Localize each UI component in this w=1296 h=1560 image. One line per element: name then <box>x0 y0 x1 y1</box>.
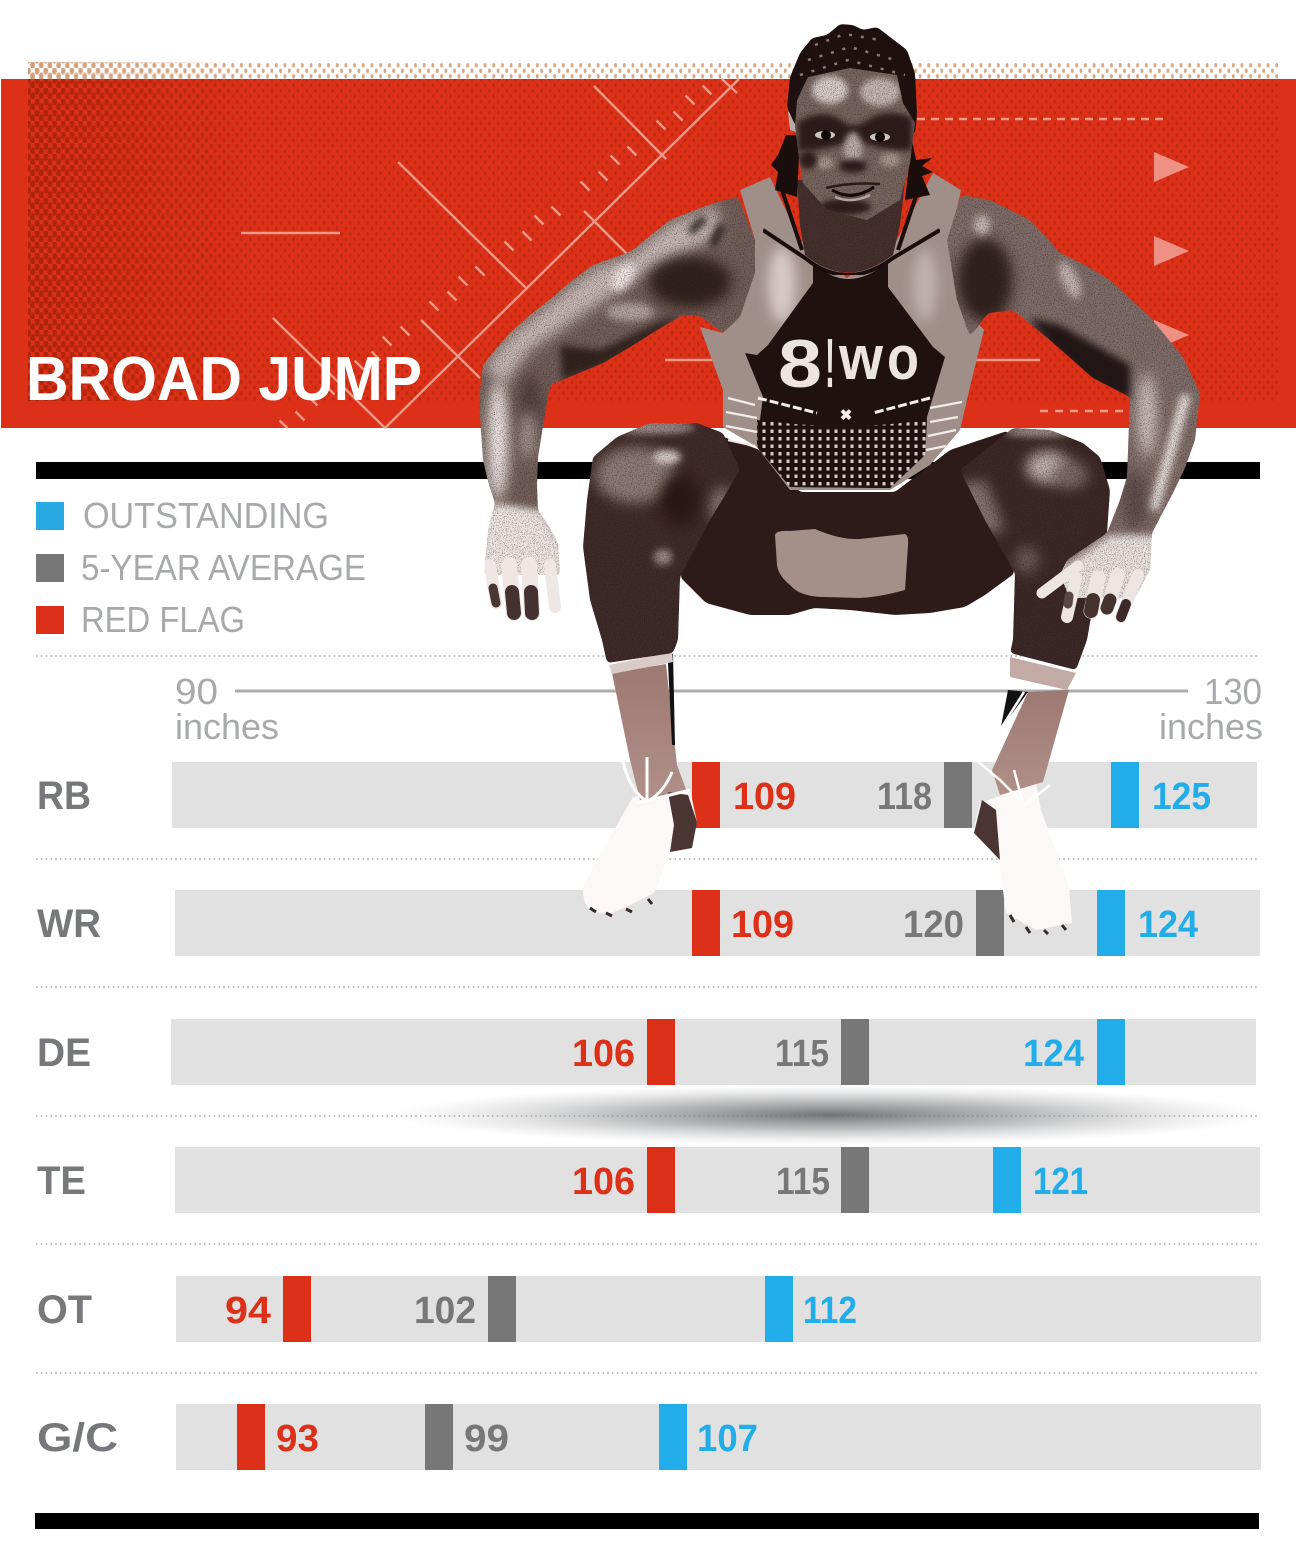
row: OT: 94 <box>225 1290 271 1332</box>
chest and neck <box>763 180 940 275</box>
axis scale: 90 to 130 inches: 130 <box>1204 671 1262 712</box>
eyes <box>815 130 890 142</box>
right hand fingers <box>1042 566 1138 617</box>
row: G/C: 107 <box>697 1418 758 1460</box>
jersey weave <box>757 420 927 488</box>
side braids <box>771 135 933 200</box>
row: TE: 115 <box>776 1161 830 1203</box>
right arm <box>948 196 1200 598</box>
panel: red header band <box>1 79 1296 428</box>
axis scale: 90 to 130 inches <box>175 671 1263 747</box>
mouth <box>826 184 880 200</box>
ear <box>788 112 796 132</box>
row: OT: 102 <box>414 1290 476 1332</box>
right sock and cleat <box>970 657 1076 934</box>
bottom black rule <box>35 1513 1259 1529</box>
shorts <box>680 425 1015 615</box>
row: WR <box>37 890 1260 956</box>
jersey lettering: o <box>887 324 919 393</box>
legend: 5-YEAR AVERAGE <box>81 547 366 588</box>
jersey lettering: 8 <box>778 326 822 402</box>
row: DE <box>37 1019 1256 1085</box>
face <box>795 68 915 220</box>
head <box>771 24 933 230</box>
jersey side stripes <box>726 398 962 450</box>
left leg <box>583 423 739 662</box>
jersey lettering: w <box>838 324 884 393</box>
halftone strip above band <box>28 62 1278 79</box>
hair <box>787 24 917 135</box>
row: DE: 106 <box>572 1033 635 1075</box>
row: WR: 109 <box>731 904 794 946</box>
athlete: jumping football player <box>470 24 1210 934</box>
jersey <box>700 173 984 490</box>
jersey logo: ✖ <box>840 407 852 424</box>
row: TE: TE <box>37 1159 86 1203</box>
row: G/C: G/C <box>37 1416 118 1460</box>
icon: field arrows <box>1154 152 1189 350</box>
row: TE <box>37 1147 1260 1213</box>
row: G/C: 93 <box>276 1418 319 1460</box>
left sock and cleat <box>583 652 697 916</box>
row: RB: 118 <box>877 776 932 818</box>
legend <box>36 495 366 640</box>
axis scale: 90 to 130 inches: inches <box>1159 706 1263 747</box>
row: G/C <box>37 1404 1261 1470</box>
top black rule <box>36 462 1260 479</box>
row: RB <box>37 762 1257 828</box>
football field lines <box>241 79 1166 428</box>
left hand fingers <box>490 565 555 613</box>
row: RB: 125 <box>1152 776 1211 818</box>
row: WR: WR <box>37 902 101 946</box>
row: RB: 109 <box>733 776 796 818</box>
row: RB: RB <box>37 774 91 818</box>
axis scale: 90 to 130 inches: 90 <box>175 671 218 712</box>
row: DE: 124 <box>1023 1033 1084 1075</box>
legend: RED FLAG <box>81 599 245 640</box>
right leg <box>962 428 1110 669</box>
row: TE: 106 <box>572 1161 635 1203</box>
row: G/C: 99 <box>464 1418 509 1460</box>
axis scale: 90 to 130 inches: inches <box>175 706 279 747</box>
jersey lettering <box>778 324 919 402</box>
row: DE: 115 <box>775 1033 829 1075</box>
row: OT <box>37 1276 1261 1342</box>
hair braid highlights <box>800 34 905 75</box>
row: TE: 121 <box>1033 1161 1088 1203</box>
row: WR: 124 <box>1138 904 1198 946</box>
jersey lettering: ! <box>825 324 835 402</box>
legend: OUTSTANDING <box>83 495 329 536</box>
row: WR: 120 <box>903 904 964 946</box>
title: BROAD JUMP <box>26 345 422 414</box>
row: OT: 112 <box>803 1290 857 1332</box>
row: DE: DE <box>37 1031 91 1075</box>
row: OT: OT <box>37 1288 92 1332</box>
shorts pad <box>775 529 908 598</box>
landing shadow <box>390 1085 1270 1145</box>
left arm <box>479 198 755 575</box>
